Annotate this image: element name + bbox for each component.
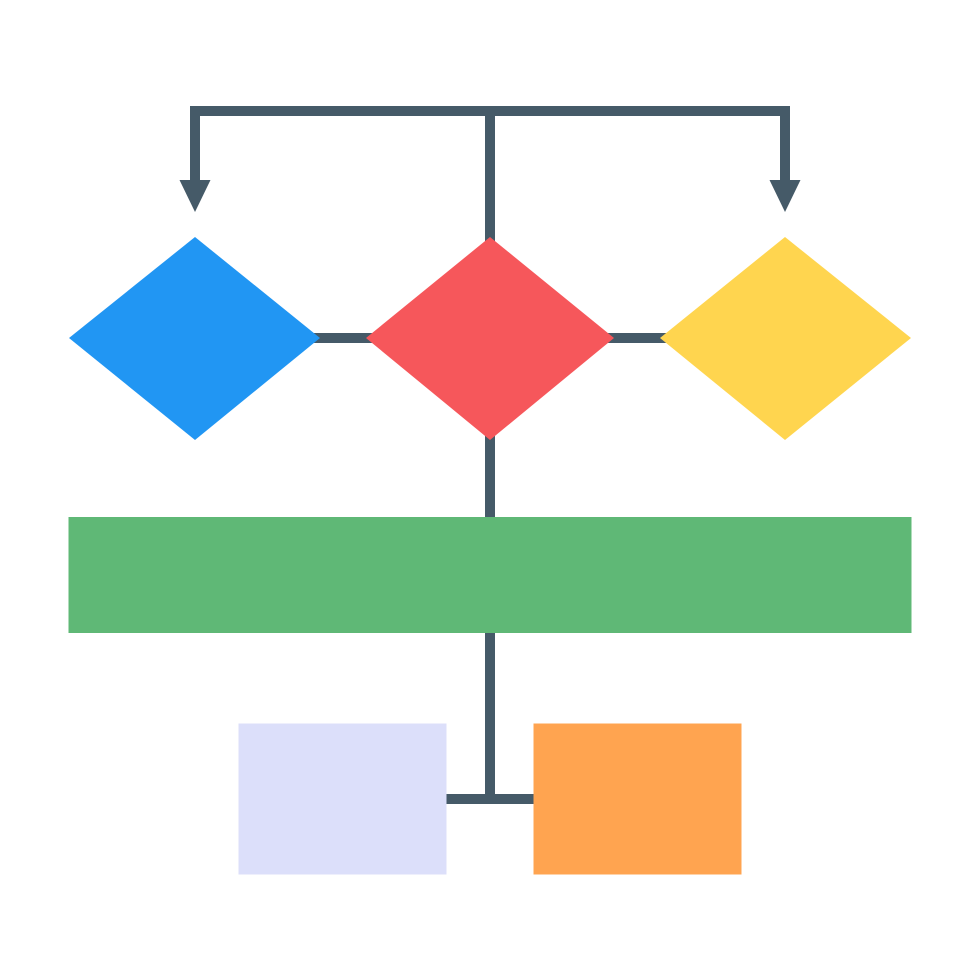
connector: top branch line [195, 111, 785, 245]
connector: green bar to lower boxes [440, 630, 540, 799]
diamond: blue [69, 237, 320, 440]
diamond: yellow [660, 237, 911, 440]
diamond: red [366, 237, 614, 440]
bar: green [68, 517, 912, 633]
box: lavender [238, 724, 446, 874]
connector: horizontal link between diamonds [310, 333, 670, 343]
arrow: right [770, 180, 800, 212]
arrow: left [180, 180, 210, 212]
connector: red diamond to green bar [485, 430, 495, 520]
box: orange [534, 724, 742, 874]
